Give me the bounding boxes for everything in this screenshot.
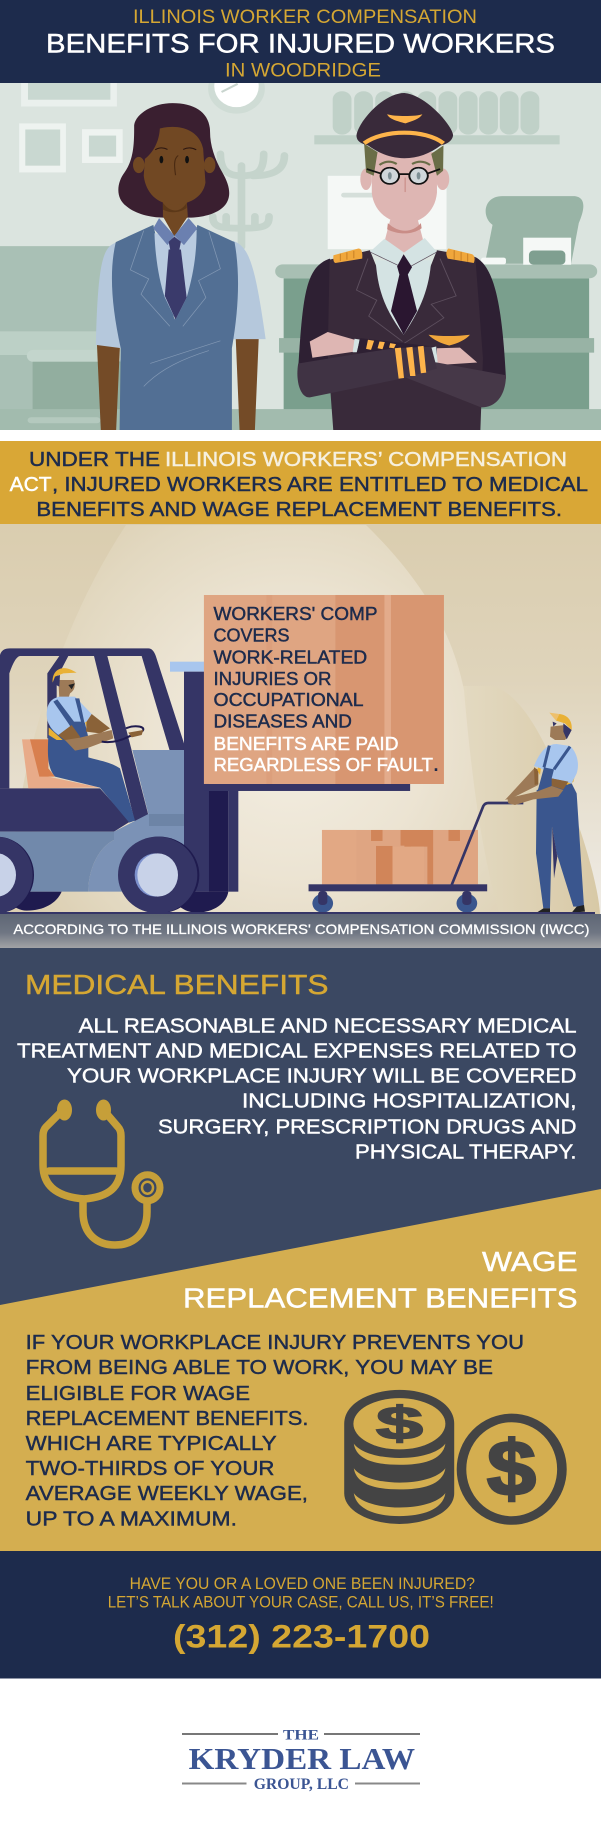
wage benefits paragraph: IF YOUR WORKPLACE INJURY PREVENTS YOU: [26, 1331, 524, 1354]
heading: wage replacement benefits: WAGE: [482, 1246, 578, 1277]
medical benefits paragraph: TREATMENT AND MEDICAL EXPENSES RELATED TO: [17, 1040, 576, 1063]
wage benefits paragraph: [26, 1331, 524, 1531]
large cardboard box: [204, 595, 444, 791]
forklift wheels: [0, 837, 199, 913]
cart handle and worker: [452, 713, 585, 913]
logo: The Kryder Law Group: [182, 1727, 420, 1793]
woman in blue vest: [96, 103, 266, 430]
heading: wage replacement benefits: REPLACEMENT BENEFITS: [183, 1282, 578, 1313]
box text: workers' comp covers: WORK-RELATED: [214, 647, 367, 667]
logo: The Kryder Law Group: THE: [283, 1727, 319, 1743]
forklift and driver: [0, 648, 238, 913]
wage benefits paragraph: AVERAGE WEEKLY WAGE,: [26, 1482, 308, 1505]
panel: medical benefits: [0, 948, 601, 1308]
box text: workers' comp covers: INJURIES OR: [214, 669, 332, 689]
title line: In Woodridge: IN WOODRIDGE: [225, 59, 381, 81]
phone number: (312) 223-1700: [173, 1619, 430, 1655]
wage benefits paragraph: UP TO A MAXIMUM.: [26, 1508, 237, 1531]
logo: The Kryder Law Group: GROUP, LLC: [254, 1776, 349, 1793]
icon: coins: $: [376, 1397, 423, 1449]
medical benefits paragraph: SURGERY, PRESCRIPTION DRUGS AND: [158, 1116, 576, 1139]
wage benefits paragraph: FROM BEING ABLE TO WORK, YOU MAY BE: [26, 1356, 493, 1379]
panel: call to action: [0, 1551, 601, 1678]
box text: workers' comp covers: REGARDLESS OF FAULT: [214, 755, 433, 775]
box text: workers' comp covers: BENEFITS ARE PAID: [214, 734, 398, 754]
wage benefits paragraph: ELIGIBLE FOR WAGE: [26, 1382, 250, 1405]
heading: medical benefits: MEDICAL BENEFITS: [25, 969, 328, 1000]
box text: workers' comp covers: WORKERS' COMP: [214, 604, 378, 624]
icon: stethoscope: [43, 1102, 160, 1245]
intro text: BENEFITS AND WAGE REPLACEMENT BENEFITS.: [36, 498, 562, 521]
box text: workers' comp covers: COVERS: [214, 626, 290, 646]
wage benefits paragraph: TWO-THIRDS OF YOUR: [26, 1457, 274, 1480]
source strip: [0, 914, 601, 948]
panel: wage replacement benefits: [0, 1189, 601, 1551]
warehouse background arches: [8, 525, 600, 915]
heading: wage replacement benefits: [183, 1246, 578, 1313]
medical benefits paragraph: INCLUDING HOSPITALIZATION,: [242, 1090, 576, 1113]
source strip: ACCORDING TO THE ILLINOIS WORKERS' COMPENSATION COMMISSION (IWCC): [13, 921, 589, 937]
driver: [30, 668, 143, 823]
hand cart boxes and platform: [309, 830, 487, 913]
box text: workers' comp covers: .: [434, 755, 439, 775]
call to action text: LET’S TALK ABOUT YOUR CASE, CALL US, IT’S FREE!: [108, 1594, 494, 1612]
logo: The Kryder Law Group: KRYDER LAW: [189, 1741, 415, 1776]
title line: Illinois Worker Compensation: ILLINOIS WORKER COMPENSATION: [133, 6, 477, 28]
warehouse illustration: [0, 524, 601, 915]
call to action text: [108, 1575, 494, 1612]
box text: workers' comp covers: [214, 604, 439, 775]
pilot with crossed arms: [297, 93, 506, 433]
box text: workers' comp covers: DISEASES AND: [214, 712, 352, 732]
main title: BENEFITS FOR INJURED WORKERS: [46, 28, 555, 58]
intro text: UNDER THE: [29, 448, 160, 471]
forklift rear wheel shadow and chassis: [0, 648, 238, 913]
intro text: ILLINOIS WORKERS’ COMPENSATION: [165, 448, 567, 471]
cart handle: [452, 803, 523, 885]
medical benefits paragraph: PHYSICAL THERAPY.: [355, 1141, 576, 1164]
office illustration with two workers: [0, 64, 601, 433]
seat: [22, 739, 100, 788]
wage benefits paragraph: WHICH ARE TYPICALLY: [26, 1432, 277, 1455]
header banner: [0, 0, 601, 83]
call to action text: HAVE YOU OR A LOVED ONE BEEN INJURED?: [130, 1575, 475, 1593]
icon: coins: [344, 1390, 562, 1524]
icon: coins: $: [487, 1424, 536, 1512]
medical benefits paragraph: [17, 1015, 577, 1164]
medical benefits paragraph: YOUR WORKPLACE INJURY WILL BE COVERED: [67, 1065, 576, 1088]
gold intro band: [0, 441, 601, 524]
office background: [0, 64, 601, 433]
medical benefits paragraph: ALL REASONABLE AND NECESSARY MEDICAL: [79, 1015, 577, 1038]
box text: workers' comp covers: OCCUPATIONAL: [214, 690, 364, 710]
wage benefits paragraph: REPLACEMENT BENEFITS.: [26, 1407, 308, 1430]
worker pushing cart: [505, 713, 585, 913]
intro text: , INJURED WORKERS ARE ENTITLED TO MEDICAL: [52, 473, 588, 496]
intro text: ACT: [10, 473, 52, 496]
intro text: [10, 448, 588, 521]
